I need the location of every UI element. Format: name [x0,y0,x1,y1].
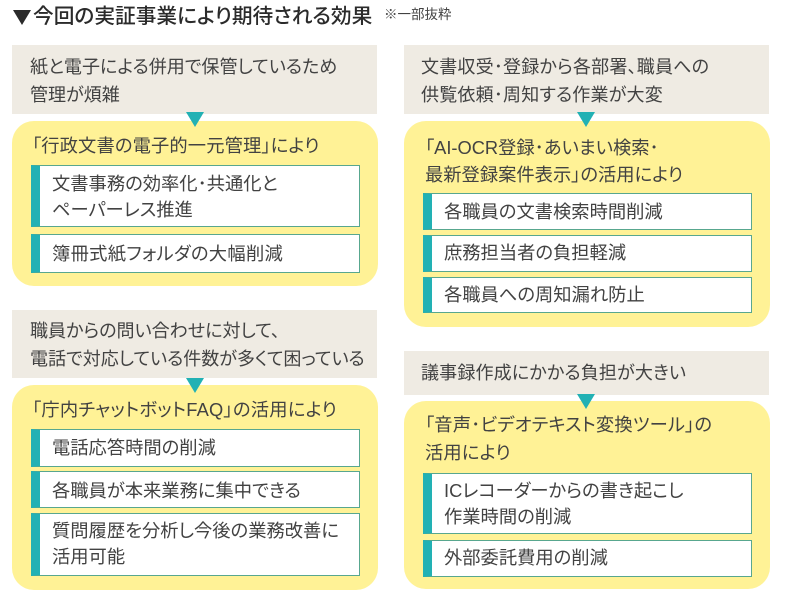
heading: 活用により [425,442,511,463]
problem text [30,57,337,105]
panel: minutes problem [404,351,769,395]
panel: circulation problem [404,45,769,114]
heading: 「AI-OCR登録･あいまい検索･ [425,137,659,158]
panel: circulation effects [404,121,770,327]
effect text [52,520,339,567]
effect: efficiency [31,165,360,227]
problem text: 管理が煩雑 [30,85,120,105]
panel: paper management effects [12,121,378,286]
arrow [577,394,595,409]
problem text: 職員からの問い合わせに対して、 [30,321,280,341]
problem text: 議事録作成にかかる負担が大きい [421,363,686,383]
effect text: 外部委託費用の削減 [444,547,608,568]
effect: response time [31,429,360,467]
panel: paper management problem [12,45,377,114]
note: ※一部抜粋 [384,7,452,22]
heading [425,137,683,185]
effect text: 質問履歴を分析し今後の業務改善に [52,520,339,541]
effect: core work [31,471,360,508]
effect text: 電話応答時間の削減 [52,437,216,458]
effect text: ICレコーダーからの書き起こし [444,480,683,501]
panel: phone inquiries effects [12,385,378,590]
problem text [421,57,709,105]
problem text: 文書収受･登録から各部署、職員への [421,57,709,77]
effect text: 庶務担当者の負担軽減 [444,242,626,263]
problem text: 供覧依頼･周知する作業が大変 [421,85,663,105]
effect text [52,173,278,220]
effect text: 文書事務の効率化･共通化と [52,173,278,194]
effect text: 各職員の文書検索時間削減 [444,201,663,222]
problem text: 紙と電子による併用で保管しているため [30,57,337,77]
effect: folder reduction [31,234,360,273]
problem text [30,321,365,369]
effect: history analysis [31,513,360,576]
heading: 「庁内チャットボットFAQ」の活用により [32,399,337,420]
effect: outsourcing cost [423,540,752,577]
arrow [186,112,204,127]
icon: title triangle [13,10,31,25]
title: 今回の実証事業により期待される効果 [33,5,372,28]
heading [425,414,712,463]
effect text: 簿冊式紙フォルダの大幅削減 [52,243,283,264]
effect: clerical burden [423,235,752,272]
effect text: ペーパーレス推進 [52,199,193,220]
arrow [186,378,204,393]
effect text [444,480,683,527]
heading: 最新登録案件表示」の活用により [425,164,683,185]
heading: 「音声･ビデオテキスト変換ツール」の [425,414,712,435]
effect: transcription [423,473,752,534]
effect: notice omissions [423,277,752,313]
heading: 「行政文書の電子的一元管理」により [32,135,319,156]
effect text: 活用可能 [52,546,125,567]
effect: search time [423,193,752,230]
problem text: 電話で対応している件数が多くて困っている [30,349,365,369]
panel: phone inquiries problem [12,310,377,378]
arrow [577,112,595,127]
effect text: 各職員への周知漏れ防止 [444,284,645,305]
effect text: 作業時間の削減 [444,506,571,527]
effect text: 各職員が本来業務に集中できる [52,480,301,501]
panel: minutes effects [404,401,770,589]
